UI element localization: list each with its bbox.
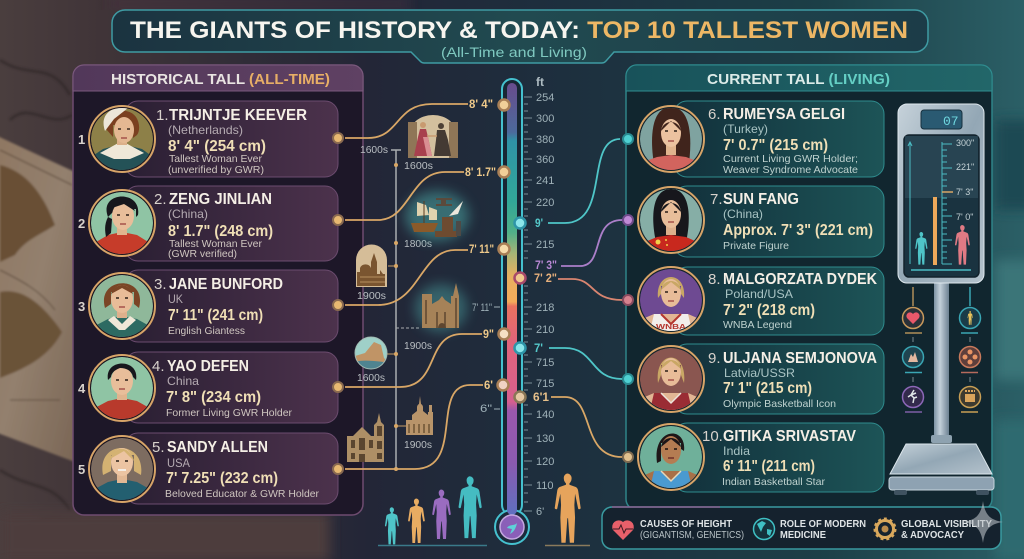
connector curves: thermometer to right cards [548,139,622,457]
illustration: landscape medallion [355,337,387,369]
silhouettes: group heights [378,476,487,546]
thermometer height scale: 130 [536,433,554,445]
card 5: Sandy Allen: 5. [152,439,165,456]
card 7: Sun Fang [638,186,884,257]
card 3: Jane Bunford: UK [168,292,183,306]
illustration: gothic tower [415,283,467,332]
card 5: Sandy Allen: USA [167,456,190,470]
scale head: 7' 3" [956,187,973,197]
scale head: 7' 0" [956,212,973,222]
panel header: historical [73,65,363,91]
card 2: Zeng Jinlian: (GWR verified) [168,248,237,260]
card 1: Trijntje Keever: 8' 4" (254 cm) [168,138,266,155]
card 10: Gitika Srivastav: GITIKA SRIVASTAV [723,428,856,445]
card 9: Uljana Semjonova: 9. [708,350,721,367]
legend: global visibility: GLOBAL VISIBILITY [901,518,992,530]
card 8: Malgorzata Dydek: 7' 2" (218 cm) [723,302,815,319]
card 2: Zeng Jinlian: ZENG JINLIAN [169,191,272,208]
panel: current tall [626,65,992,510]
card 1: Trijntje Keever [78,101,338,177]
thermometer height scale: 140 [536,409,554,421]
card 9: Uljana Semjonova: ULJANA SEMJONOVA [723,350,877,367]
left height tags [465,99,500,415]
side icons: right column [960,287,980,412]
card 8: Malgorzata Dydek: Poland/USA [725,287,793,301]
card 2: Zeng Jinlian: (China) [168,207,208,221]
scale platform [889,435,994,495]
card 9: Uljana Semjonova: 7' 1" (215 cm) [723,380,812,397]
legend: global visibility: & ADVOCACY [901,529,964,541]
legend: causes of height: (GIGANTISM, GENETICS) [640,530,744,541]
card 1: Trijntje Keever: Tallest Woman Ever [169,153,262,165]
card 5: Sandy Allen [78,433,338,504]
thermometer height scale: ft [536,75,544,89]
thermometer height scale: 254 [536,92,554,104]
scale ticks [524,97,532,511]
illustration: domed building [356,244,387,287]
card 2: Zeng Jinlian: 2. [154,191,167,208]
timeline of eras: 1900s [404,439,432,451]
card 4: Yao Defen: 7' 8" (234 cm) [166,389,261,406]
legend: causes of height: CAUSES OF HEIGHT [640,518,733,530]
parchment map [0,135,75,462]
illustration: ship and quill [405,191,469,241]
connector nodes: left cards [333,133,343,474]
timeline of eras: 1900s [404,340,432,352]
side icons: left column [902,287,924,412]
thermometer height scale: 210 [536,324,554,336]
card 10: Gitika Srivastav: Indian Basketball Star [722,476,825,488]
card 3: Jane Bunford: English Giantess [168,325,245,337]
screen ruler [908,142,971,270]
card 1: Trijntje Keever: 1. [156,107,169,124]
card 10: Gitika Srivastav: India [723,444,750,458]
left height tags: 9" [483,329,494,341]
right height tags [533,216,557,404]
card 4: Yao Defen: 4 [78,381,86,396]
card 4: Yao Defen: 4. [152,358,165,375]
card 8: Malgorzata Dydek: WNBA [656,324,686,331]
right height tags: 6'1 [533,390,549,404]
thermometer height scale: 380 [536,134,554,146]
card 7: Sun Fang: (China) [723,207,763,221]
panel: historical tall [73,65,363,515]
sparkle mark [963,501,1003,543]
card 4: Yao Defen: China [167,374,199,388]
thermometer height scale: 300 [536,113,554,125]
illustration: cathedral [347,413,384,462]
card 4: Yao Defen: Former Living GWR Holder [166,407,292,419]
right height tags: 9' [535,216,543,230]
card 6: Rumeysa Gelgi: 7' 0.7" (215 cm) [723,137,828,154]
card 5: Sandy Allen: 7' 7.25" (232 cm) [166,470,278,487]
card 3: Jane Bunford: 3 [78,299,85,314]
card 6: Rumeysa Gelgi: Current Living GWR Holder; [723,153,858,165]
left height tags: 6' [484,380,493,392]
marker nodes [498,100,526,402]
left height tags: 7' 11" [472,302,492,314]
card 1: Trijntje Keever: (unverified by GWR) [168,164,264,176]
card 2: Zeng Jinlian: 2 [78,216,85,231]
card 10: Gitika Srivastav: 6' 11" (211 cm) [723,458,815,475]
timeline of eras: 1600s [357,372,385,384]
thermometer height scale: 110 [536,480,554,492]
footer legend [602,507,1001,549]
timeline of eras: 1900s [357,290,386,302]
thermometer height scale [465,75,557,544]
right height tags: 7' 2" [534,271,557,285]
card 5: Sandy Allen: 5 [78,462,85,477]
card 7: Sun Fang: SUN FANG [723,191,799,208]
silhouette: tallest woman [545,473,590,546]
thermometer height scale: 220 [536,197,554,209]
legend: global visibility [874,518,992,541]
subtitle: (All-Time and Living) [441,44,587,60]
card 9: Uljana Semjonova: Latvia/USSR [724,366,795,380]
card 6: Rumeysa Gelgi [638,101,884,177]
digital readout: 07 [943,114,959,129]
timeline of eras [357,144,433,471]
right height tags: 7' 3" [535,258,557,272]
card 6: Rumeysa Gelgi: 6. [708,106,721,123]
card 6: Rumeysa Gelgi: (Turkey) [723,122,768,136]
title banner [112,10,928,63]
legend: modern medicine [754,518,866,541]
card 8: Malgorzata Dydek: 8. [708,271,721,288]
thermometer height scale: 360 [536,154,554,166]
card 10: Gitika Srivastav [638,423,884,492]
panel header: historical: HISTORICAL TALL (ALL-TIME) [111,71,330,88]
left height tags: 7' 11" [469,244,494,256]
scale pole [934,283,949,435]
card 8: Malgorzata Dydek: WNBA Legend [723,319,792,331]
card 2: Zeng Jinlian [78,186,338,261]
thermometer height scale: 715 [536,357,554,369]
timeline of eras: 1600s [360,144,388,156]
illustration: 1600s couple scene [408,115,458,158]
card 8: Malgorzata Dydek [638,267,884,335]
card 7: Sun Fang: Approx. 7' 3" (221 cm) [723,222,873,239]
left height tags: 8' 1.7" [465,167,496,179]
title text: THE GIANTS OF HISTORY & TODAY: TOP 10 TALLEST WOMEN [130,17,908,44]
card 6: Rumeysa Gelgi: RUMEYSA GELGI [723,106,845,123]
card 3: Jane Bunford: 3. [154,276,167,293]
illustration: palace [406,396,433,435]
thermometer height scale: 715 [536,378,554,390]
thermometer height scale: 120 [536,456,554,468]
card 8: Malgorzata Dydek: MALGORZATA DYDEK [723,271,877,288]
legend: modern medicine: MEDICINE [780,529,826,541]
card 10: Gitika Srivastav: 10. [702,428,723,445]
scale head: 300" [956,138,974,148]
card 1: Trijntje Keever: (Netherlands) [168,123,243,137]
legend: modern medicine: ROLE OF MODERN [780,518,866,530]
card 5: Sandy Allen: Beloved Educator & GWR Holder [165,488,319,500]
right height tags: 7' [534,341,543,355]
card 7: Sun Fang: 7. [710,191,723,208]
thermometer height scale: 218 [536,302,554,314]
card 5: Sandy Allen: SANDY ALLEN [167,439,268,456]
thermometer height scale: 241 [536,175,554,187]
timeline of eras: 1600s [404,160,433,172]
scale head: 221" [956,162,974,172]
panel header: current [626,65,992,91]
card 9: Uljana Semjonova [638,344,884,414]
card 4: Yao Defen [78,352,338,423]
timeline of eras: 1800s [404,238,432,250]
scale head [898,104,984,283]
card 4: Yao Defen: YAO DEFEN [167,358,249,375]
card 9: Uljana Semjonova: Olympic Basketball Icon [723,398,836,410]
height measuring scale [889,104,994,495]
card 1: Trijntje Keever: TRIJNTJE KEEVER [169,107,307,124]
card 7: Sun Fang: Private Figure [723,240,789,252]
panel header: current: CURRENT TALL (LIVING) [707,71,890,88]
connector nodes: right cards [623,134,633,462]
card 1: Trijntje Keever: 1 [78,132,85,147]
thermometer height scale: 6' [536,506,544,518]
card 3: Jane Bunford: 7' 11" (241 cm) [168,307,263,324]
card 3: Jane Bunford: JANE BUNFORD [169,276,283,293]
thermometer height scale: 215 [536,239,554,251]
digital readout [921,110,962,129]
card 6: Rumeysa Gelgi: Weaver Syndrome Advocate [723,164,858,176]
connector curves: left cards to thermometer [345,104,483,469]
card 3: Jane Bunford [78,270,338,342]
legend: causes of height [612,518,744,541]
card 2: Zeng Jinlian: 8' 1.7" (248 cm) [168,223,273,240]
card 2: Zeng Jinlian: Tallest Woman Ever [169,238,262,250]
left height tags: 6" [480,403,492,415]
left height tags: 8' 4" [469,99,493,111]
